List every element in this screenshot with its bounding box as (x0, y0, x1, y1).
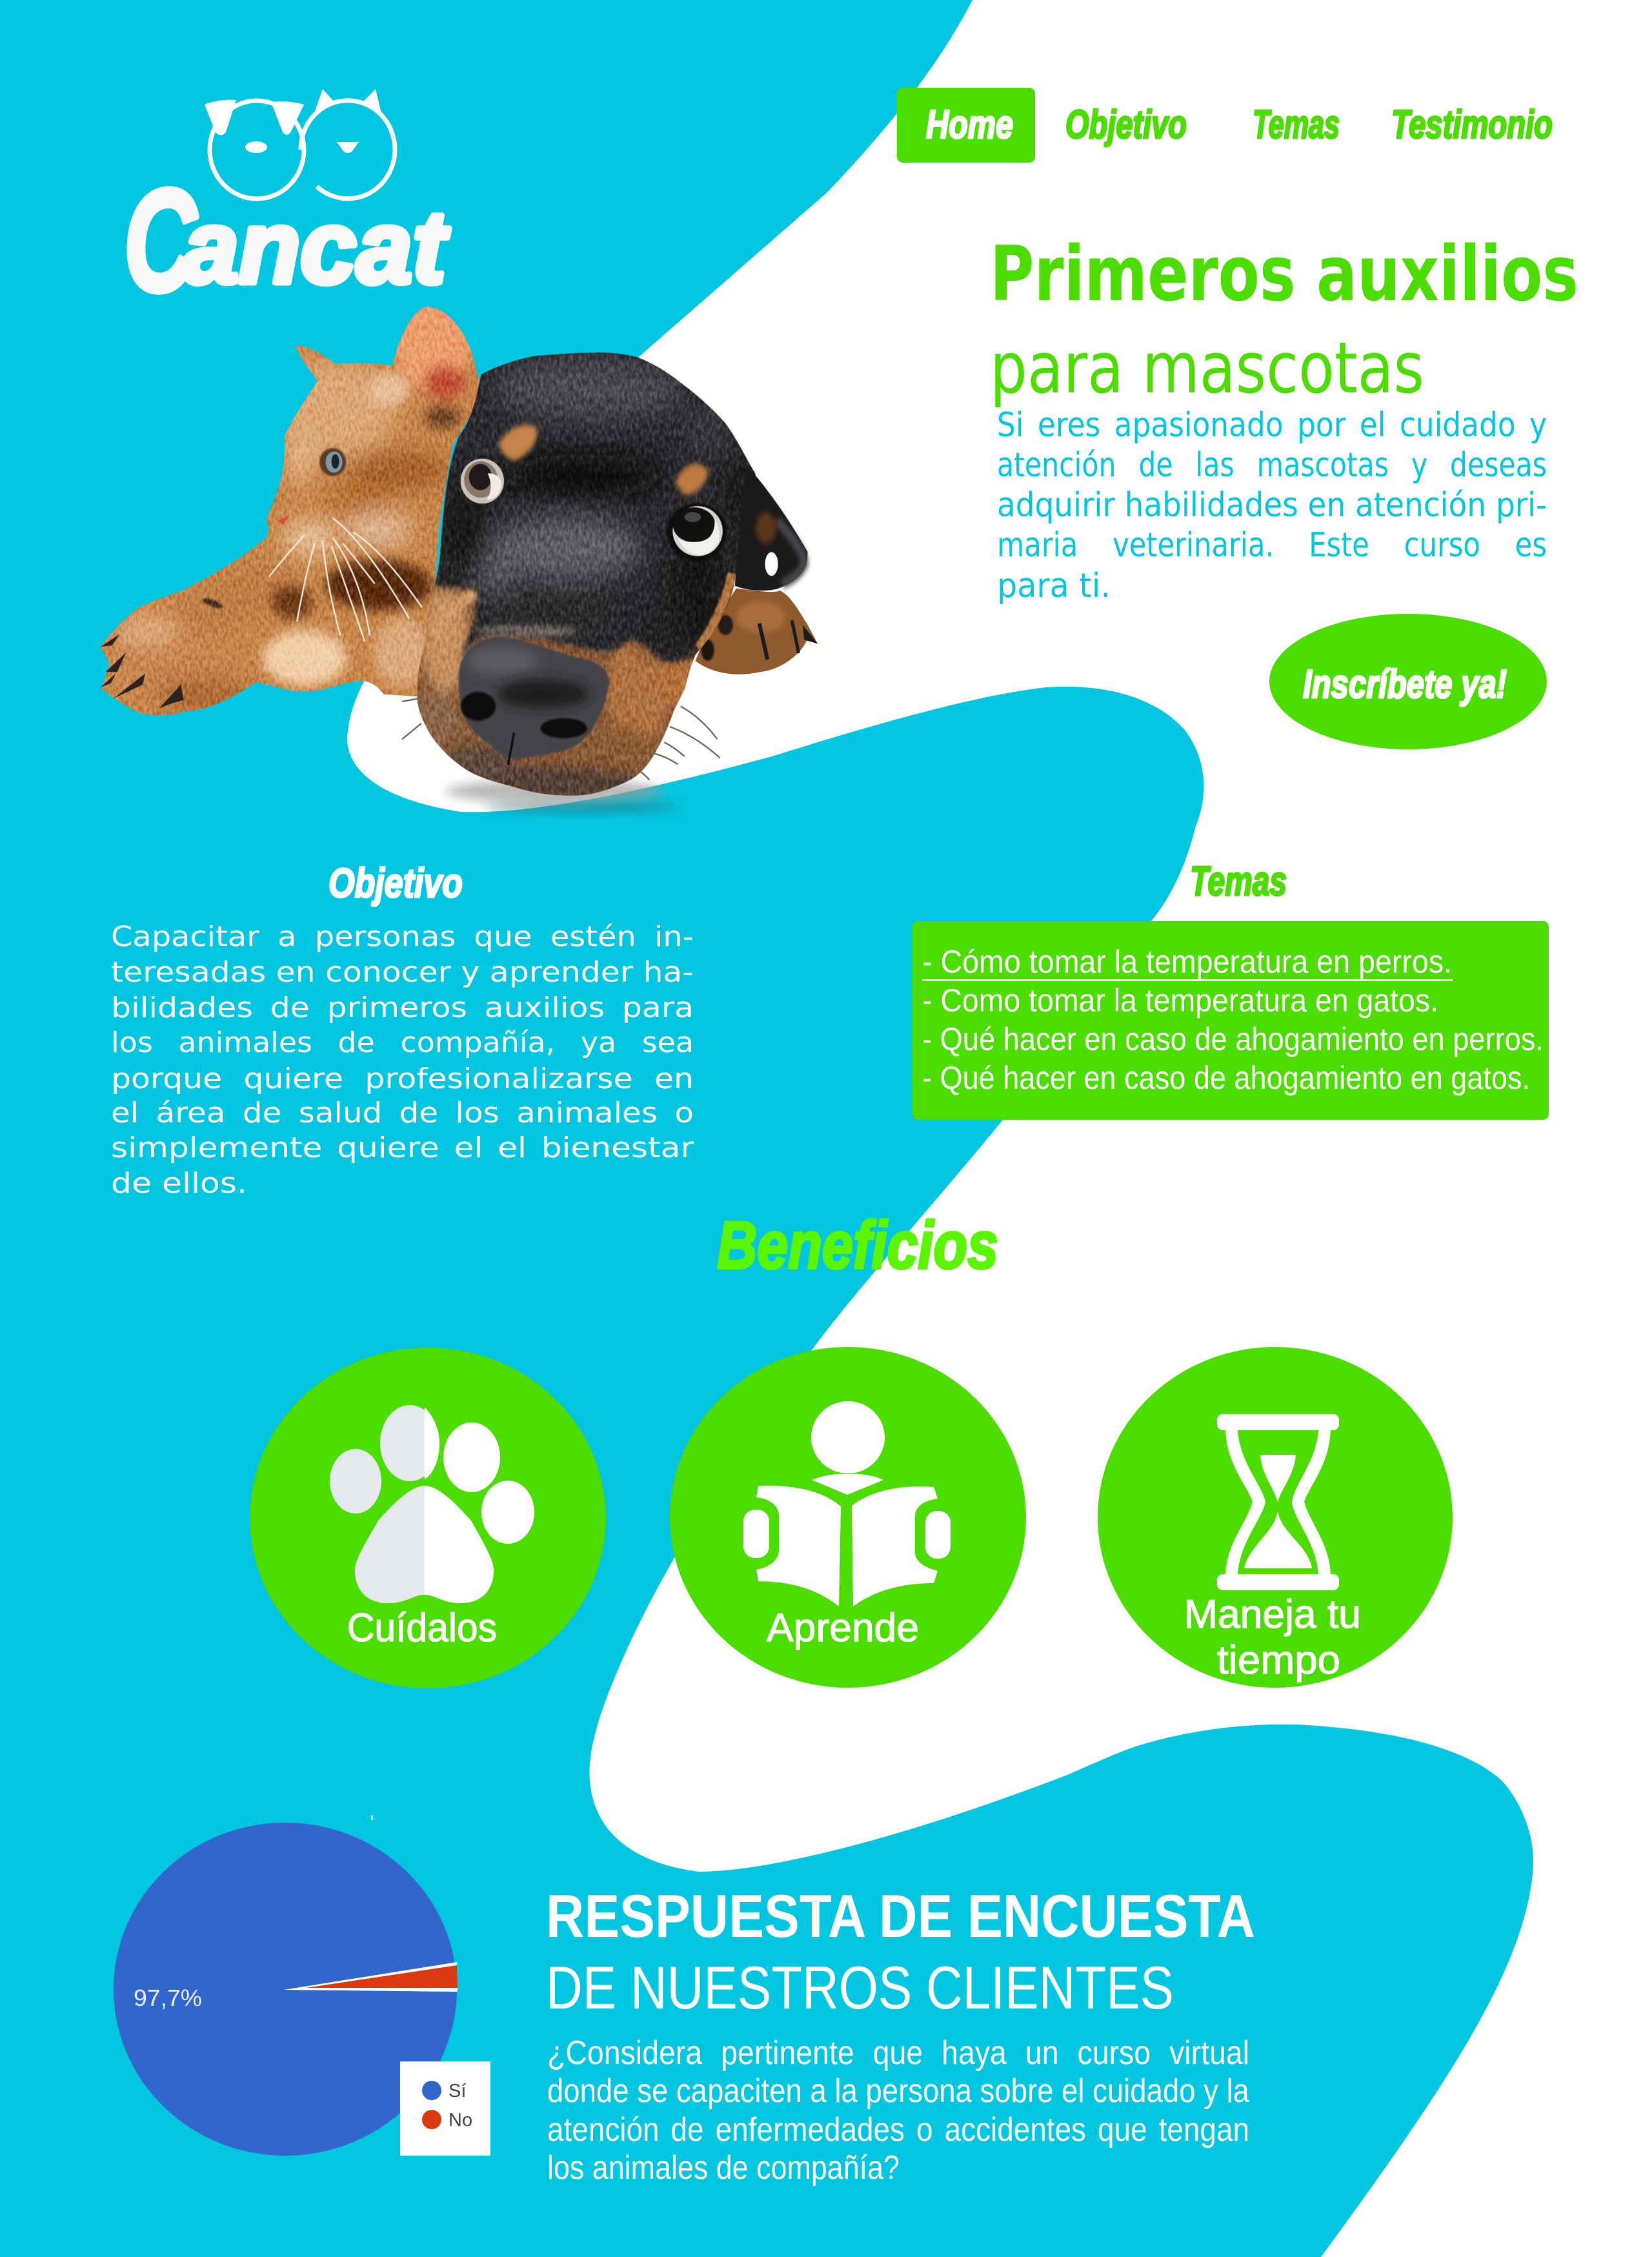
topic lines: - Qué hacer en caso de ahogamiento en perros. (922, 1021, 1544, 1057)
puppy head (417, 352, 756, 796)
black upper head (413, 336, 839, 662)
nav: Home button: Home (926, 103, 1013, 147)
objective paragraph: teresadas en conocer y aprender ha- (111, 956, 694, 989)
heading: Beneficios: Beneficios (717, 1208, 998, 1283)
puppy nose (459, 636, 609, 765)
title (990, 229, 1578, 409)
nav: Temas: Temas (1253, 103, 1340, 147)
logo wordmark: C (124, 159, 197, 321)
objective paragraph: bilidades de primeros auxilios para (111, 991, 694, 1024)
objective paragraph: simplemente quiere el el bienestar (111, 1131, 694, 1164)
title: para mascotas (990, 327, 1424, 409)
cat (101, 307, 480, 715)
puppy left eye (461, 458, 504, 503)
topic lines: - Como tomar la temperatura en gatos. (922, 982, 1438, 1018)
survey question: ¿Considera pertinente que haya un curso virtual (547, 2034, 1249, 2072)
benefit: Aprende (670, 1347, 1026, 1688)
topic lines (922, 944, 1544, 1096)
survey question: donde se capaciten a la persona sobre el cuidado y la (547, 2072, 1249, 2110)
objective paragraph: los animales de compañía, ya sea (111, 1026, 694, 1059)
intro paragraph (997, 406, 1547, 605)
legend: No (448, 2110, 472, 2130)
cat whiskers (269, 518, 422, 641)
objective paragraph: el área de salud de los animales o (111, 1097, 694, 1129)
icon: paw (330, 1405, 534, 1603)
intro paragraph: para ti. (997, 567, 1111, 605)
muzzle-tan edge strip (698, 573, 732, 649)
objective paragraph: de ellos. (111, 1167, 247, 1200)
topic lines: - Cómo tomar la temperatura en perros. (922, 944, 1452, 980)
topic lines: - Qué hacer en caso de ahogamiento en gatos. (922, 1060, 1530, 1096)
shadow under puppy (445, 780, 678, 813)
cat fur shading (103, 361, 450, 709)
logo icon: dog and cat faces (205, 89, 395, 199)
nav: Home button (897, 88, 1035, 163)
benefit: Cuídalos (250, 1348, 606, 1688)
objective paragraph: Capacitar a personas que estén in- (111, 920, 694, 953)
button: Inscríbete ya (1269, 614, 1547, 749)
label: Cuídalos (347, 1606, 497, 1650)
survey question: los animales de compañía? (547, 2149, 900, 2187)
nav: Testimonio: Testimonio (1391, 103, 1553, 147)
slice: No (284, 1962, 458, 1992)
value label: 97,7% (134, 1985, 202, 2011)
logo: Cancat (124, 89, 450, 321)
panel: temas list (912, 921, 1549, 1120)
legend (400, 2061, 490, 2156)
button: Inscríbete ya: Inscríbete ya! (1303, 662, 1507, 707)
puppy whiskers (402, 698, 720, 780)
intro paragraph: Si eres apasionado por el cuidado y (997, 406, 1547, 445)
label (1184, 1592, 1361, 1683)
icon: hourglass (1217, 1414, 1339, 1590)
label: tiempo (1217, 1638, 1340, 1683)
logo wordmark: ancat (183, 189, 450, 305)
benefit: Maneja tu tiempo (1098, 1347, 1453, 1688)
logo wordmark (124, 159, 450, 321)
legend: Sí (448, 2081, 466, 2101)
pie chart: survey results (114, 1816, 490, 2156)
puppy right eye (667, 503, 727, 561)
label: Maneja tu (1184, 1592, 1361, 1637)
intro paragraph: adquirir habilidades en atención pri- (997, 486, 1547, 525)
survey question (547, 2034, 1249, 2187)
survey heading: DE NUESTROS CLIENTES (546, 1954, 1174, 2021)
heading: Objetivo: Objetivo (328, 860, 463, 906)
photo: cat and puppy (90, 297, 839, 826)
cat eye (319, 448, 346, 476)
survey heading (546, 1882, 1255, 2021)
icon: person reading book (743, 1401, 951, 1606)
label: Aprende (767, 1606, 919, 1650)
objective paragraph: porque quiere profesionalizarse en (111, 1062, 694, 1095)
survey heading: RESPUESTA DE ENCUESTA (546, 1882, 1255, 1950)
intro paragraph: atención de las mascotas y deseas (997, 446, 1547, 485)
objective paragraph (111, 920, 694, 1200)
nav: Objetivo: Objetivo (1065, 103, 1187, 147)
cat claws (101, 634, 183, 709)
cat ear and neck shading (263, 299, 470, 686)
heading: Temas: Temas (1190, 858, 1287, 904)
puppy brow spots (499, 425, 708, 495)
intro paragraph: maria veterinaria. Este curso es (997, 526, 1547, 565)
puppy ear (735, 464, 807, 591)
tan muzzle shading (416, 586, 696, 800)
puppy (401, 352, 818, 796)
survey question: atención de enfermedades o accidentes que tengan (547, 2111, 1249, 2149)
puppy paw (696, 589, 818, 674)
